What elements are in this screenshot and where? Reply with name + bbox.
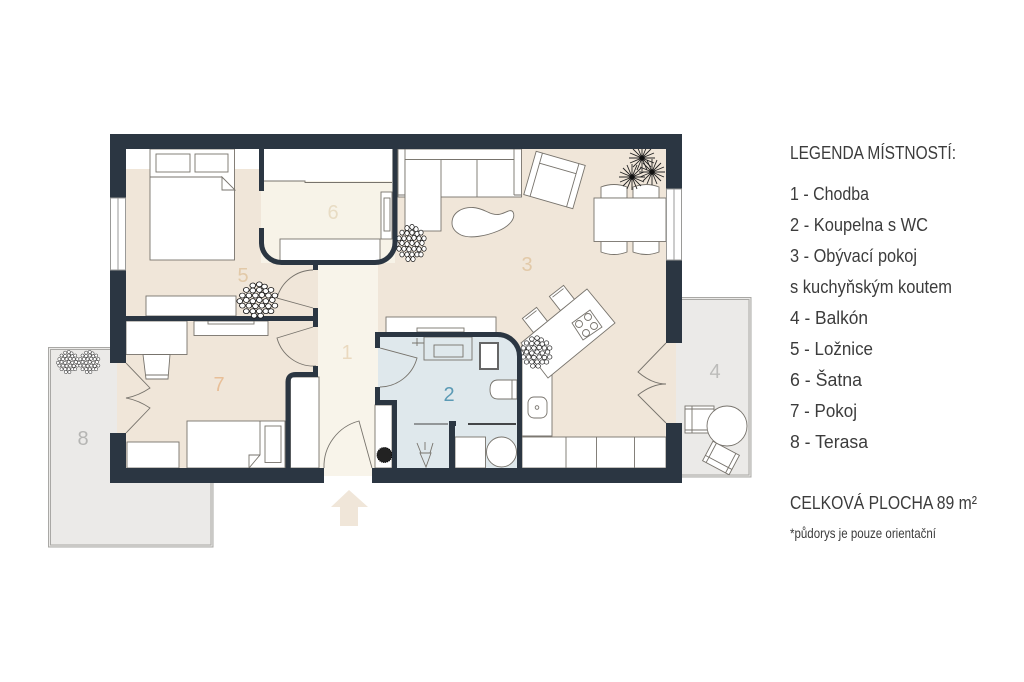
dresser: [146, 296, 236, 316]
legend items: 4 - Balkón: [790, 307, 868, 328]
legend items: 2 - Koupelna s WC: [790, 214, 928, 235]
legend items: [790, 183, 952, 452]
room numbers: 2: [443, 384, 455, 406]
walk-in closet furniture: [264, 149, 392, 261]
rug: [452, 207, 514, 237]
room numbers: [77, 202, 721, 450]
hallway wardrobe: [290, 377, 319, 468]
sofa: [398, 149, 522, 231]
room numbers: 5: [237, 265, 249, 287]
total area: CELKOVÁ PLOCHA 89 m²: [790, 492, 977, 513]
room 7 furniture: [126, 321, 285, 468]
bedroom plant: [237, 282, 278, 318]
entrance arrow: [331, 490, 368, 526]
room numbers: 1: [341, 342, 353, 364]
terrace plant: [56, 350, 100, 374]
terrace: [48, 348, 213, 547]
legend items: 6 - Šatna: [790, 369, 863, 390]
legend items: 5 - Ložnice: [790, 338, 873, 359]
legend: [790, 142, 977, 541]
doors: [126, 270, 666, 468]
kitchen island with hob: [521, 289, 615, 378]
spiky plant: [619, 145, 665, 190]
windows: [110, 189, 682, 270]
dining table with chairs: [594, 184, 666, 254]
legend items: s kuchyňským koutem: [790, 276, 952, 297]
plant by sofa: [395, 224, 426, 262]
armchair: [524, 151, 585, 209]
room floors: [117, 149, 676, 476]
walls: [110, 134, 682, 483]
room numbers: 4: [709, 361, 721, 383]
room numbers: 6: [327, 202, 339, 224]
room numbers: 3: [521, 254, 533, 276]
balcony: [676, 298, 751, 477]
room numbers: 7: [213, 374, 225, 396]
bedroom furniture: [126, 149, 259, 316]
living room console: [386, 317, 496, 333]
legend items: 7 - Pokoj: [790, 400, 857, 421]
balcony furniture: [685, 406, 747, 475]
legend items: 8 - Terasa: [790, 431, 869, 452]
double bed: [150, 149, 235, 260]
legend heading: LEGENDA MÍSTNOSTÍ:: [790, 142, 956, 163]
bathroom closet: [375, 405, 392, 468]
legend items: 3 - Obývací pokoj: [790, 245, 917, 266]
bathroom fixtures: [412, 337, 517, 468]
bar stools: [522, 285, 575, 333]
kitchen units: [522, 345, 666, 468]
round boiler: [377, 448, 392, 462]
legend items: 1 - Chodba: [790, 183, 870, 204]
plant on kitchen island: [519, 336, 552, 368]
room numbers: 8: [77, 428, 89, 450]
footnote: *půdorys je pouze orientační: [790, 525, 936, 541]
